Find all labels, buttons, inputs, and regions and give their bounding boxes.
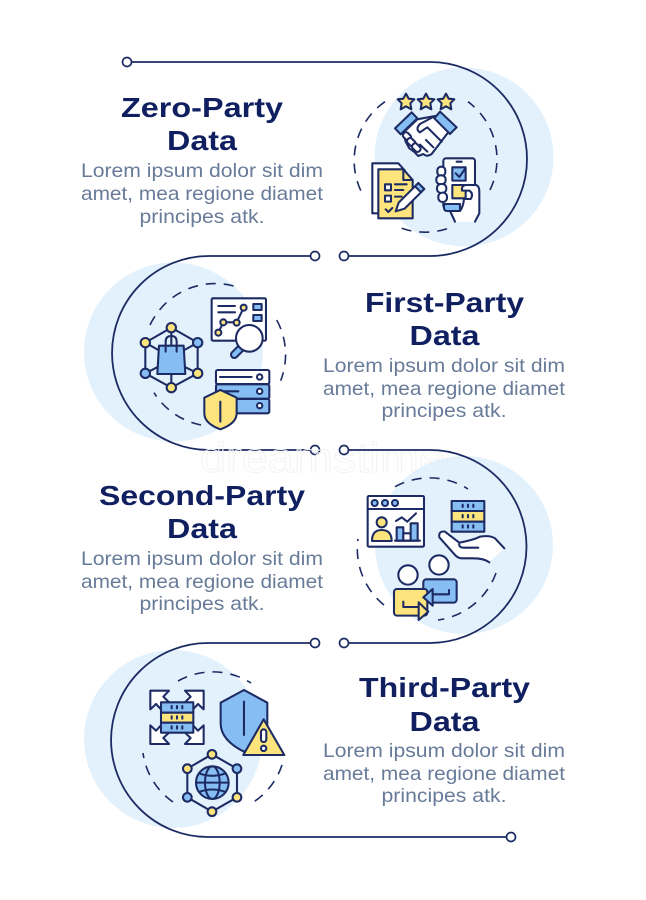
icon: three stars [398,94,454,109]
background circle [374,68,554,246]
icon: shopping bag network [141,323,202,392]
heading: First-Party [365,287,524,318]
body text [81,548,324,615]
dashed ring [143,672,282,803]
icon: browser dashboard [368,496,424,547]
connector line [111,638,516,842]
heading: Third-Party [359,672,530,703]
heading: Data [410,320,480,351]
panel: zero-party data [81,58,554,260]
icon: analytics with magnifier [212,298,266,355]
body text: amet, mea regione diamet [81,183,324,205]
icon: hand holding phone [436,158,479,222]
dashed ring [354,102,497,232]
body text: principes atk. [382,400,506,422]
heading [121,92,283,156]
body text: amet, mea regione diamet [323,763,566,785]
heading: Second-Party [99,480,305,511]
connector line [112,252,320,454]
heading: Data [410,706,480,737]
icon: shield with warning triangle [221,690,284,755]
heading: Data [167,513,237,544]
icon: two people exchanging [394,555,457,620]
dashed ring [150,284,286,425]
body text: principes atk. [140,593,264,615]
icon: server with outward arrows [150,691,204,744]
dashed ring [357,478,496,620]
icon: server with shield [204,370,269,429]
heading: Data [167,125,237,156]
watermark: dreamstime [200,434,445,481]
body text: Lorem ipsum dolor sit dim [81,160,323,182]
icon: server on hand [439,501,504,562]
body text: Lorem ipsum dolor sit dim [323,740,565,762]
icon: document with pencil [372,163,424,218]
icon: dashboard, server in hand, people exchange [368,496,504,620]
heading [359,672,530,737]
body text [323,740,566,807]
background circle [84,650,262,828]
body text: principes atk. [140,206,264,228]
body text [323,355,566,422]
icon: globe network [183,750,241,816]
connector line [122,58,527,260]
body text: Lorem ipsum dolor sit dim [81,548,323,570]
connector line [340,446,526,648]
icon: rating stars, handshake, document, phone [372,94,479,222]
icon: expanding server, shield alert, global network [150,690,284,816]
body text: amet, mea regione diamet [81,571,324,593]
icon: handshake [395,112,457,156]
body text: Lorem ipsum dolor sit dim [323,355,565,377]
background circle [84,262,263,442]
panel: second-party data [81,446,553,648]
body text: principes atk. [382,785,506,807]
heading: Zero-Party [121,92,283,123]
body text: amet, mea regione diamet [323,378,566,400]
icon: shopping network, analytics, server shield [141,298,269,429]
panel: third-party data [84,638,566,842]
background circle [375,456,553,634]
heading [365,287,524,351]
heading [99,480,305,544]
body text [81,160,324,228]
panel: first-party data [84,252,566,454]
